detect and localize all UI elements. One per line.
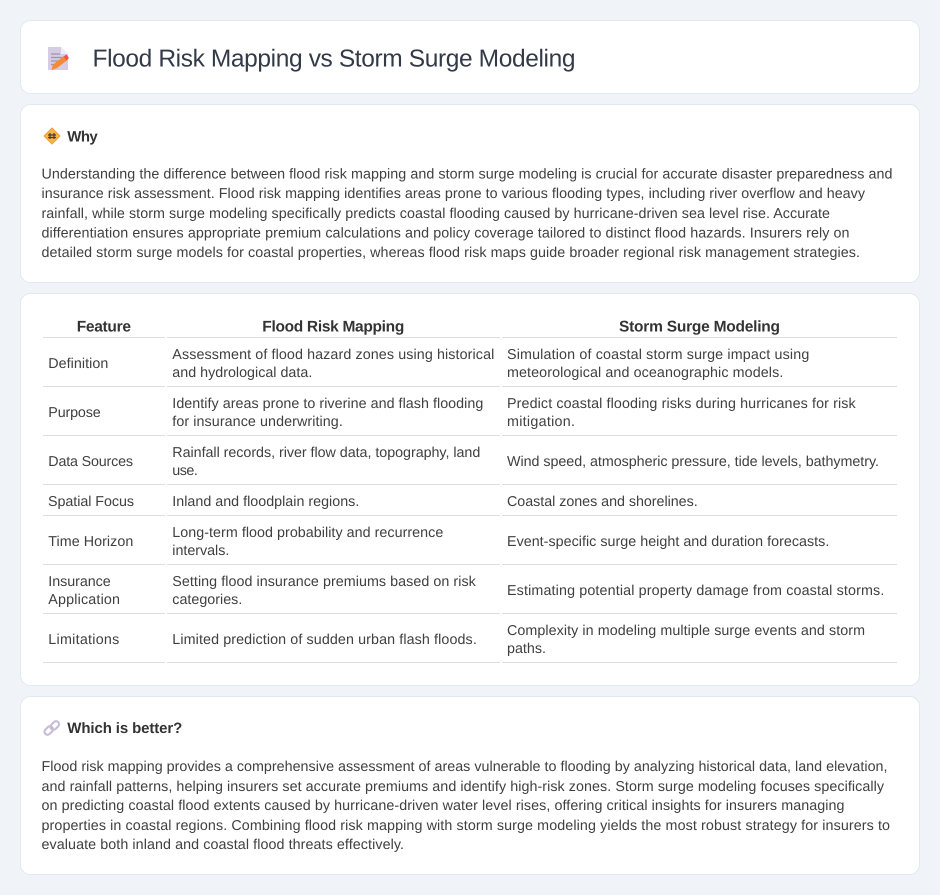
table row: insurance application: [43, 574, 897, 614]
text block: which is better paragraph: properties in coastal regions. Combining flood risk mapping with storm surge modeling yields the most robust strategy for insurers to: [42, 818, 890, 834]
table row: purpose: Predict coastal flooding risks during hurricanes for risk: [507, 396, 857, 412]
text block: which is better paragraph: and rainfall patterns, helping insurers set accurate premiums and identify high-risk zones. Storm surge modeling focuses specifically: [42, 779, 885, 795]
table header row: Storm Surge Modeling: [619, 319, 780, 336]
table row: spatial focus: Spatial Focus: [48, 494, 134, 510]
table row: data sources: Data Sources: [48, 454, 133, 470]
table row: data sources: [43, 445, 897, 485]
icon: warning diamond: [44, 128, 60, 144]
text block: which is better paragraph: on predicting coastal flood extents caused by hurricane-driven water level rises, offering critical insights for insurers managing: [42, 798, 845, 814]
table row: definition: [43, 347, 897, 387]
heading: why: Why: [67, 129, 98, 146]
table row: time horizon: Long-term flood probability and recurrence: [172, 525, 443, 541]
table row: purpose: for insurance underwriting.: [172, 414, 343, 430]
panel: title header: [20, 20, 920, 94]
table row: insurance application: categories.: [172, 592, 242, 608]
table row: time horizon: intervals.: [172, 543, 229, 559]
table row: spatial focus: Inland and floodplain regions.: [172, 494, 359, 510]
table row: time horizon: [43, 525, 897, 565]
table row: purpose: Identify areas prone to riverine and flash flooding: [172, 396, 483, 412]
table header row: Feature: [77, 319, 131, 336]
table row: limitations: Complexity in modeling multiple surge events and storm: [507, 623, 865, 639]
text block: which is better paragraph: evaluate both inland and coastal flood threats effectively.: [42, 837, 404, 853]
table row: time horizon: Time Horizon: [48, 534, 133, 550]
text block: why paragraph: differentiation ensures appropriate premium calculations and policy coverage tailored to distinct flood hazards. Insurers rely on: [42, 226, 850, 242]
text block: which is better paragraph: Flood risk mapping provides a comprehensive assessment of areas vulnerable to flooding by analyzing historical data, land elevation,: [42, 759, 888, 775]
icon: memo with pencil: [48, 47, 69, 70]
table row: limitations: paths.: [507, 641, 546, 657]
table row: data sources: Wind speed, atmospheric pressure, tide levels, bathymetry.: [507, 454, 879, 470]
icon: link: [43, 720, 60, 736]
table row: limitations: Limitations: [48, 632, 119, 648]
table row: limitations: Limited prediction of sudden urban flash floods.: [172, 632, 477, 648]
text block: why paragraph: [42, 166, 893, 261]
table row: definition: meteorological and oceanographic models.: [507, 365, 783, 381]
table row: insurance application: Application: [48, 592, 120, 608]
table row: spatial focus: [43, 494, 897, 516]
table row: purpose: Purpose: [48, 405, 101, 421]
panel: why: [20, 104, 920, 282]
table row: purpose: [43, 396, 897, 436]
table row: data sources: use.: [172, 463, 198, 479]
table row: spatial focus: Coastal zones and shorelines.: [507, 494, 698, 510]
table row: definition: Assessment of flood hazard zones using historical: [172, 347, 494, 363]
table row: data sources: Rainfall records, river flow data, topography, land: [172, 445, 480, 461]
table row: insurance application: Insurance: [48, 574, 111, 590]
table row: time horizon: Event-specific surge height and duration forecasts.: [507, 534, 829, 550]
text block: which is better paragraph: [42, 759, 890, 853]
table row: definition: Simulation of coastal storm surge impact using: [507, 347, 809, 363]
panel: which is better: [20, 696, 920, 874]
text block: why paragraph: Understanding the difference between flood risk mapping and storm surge modeling is crucial for accurate disaster preparedness and: [42, 166, 893, 182]
table header row: [43, 319, 897, 338]
table row: purpose: mitigation.: [507, 414, 575, 430]
table header row: Flood Risk Mapping: [262, 319, 404, 336]
heading: which is better: Which is better?: [67, 720, 182, 737]
text block: why paragraph: rainfall, while storm surge modeling specifically predicts coastal flooding caused by hurricane-driven sea level rise. Accurate: [42, 206, 830, 222]
text block: why paragraph: detailed storm surge models for coastal properties, whereas flood risk maps guide broader regional risk management strategies.: [42, 245, 860, 261]
table row: insurance application: Estimating potential property damage from coastal storms.: [507, 583, 884, 599]
table row: limitations: [43, 623, 897, 663]
table row: definition: Definition: [48, 356, 108, 372]
text block: why paragraph: insurance risk assessment. Flood risk mapping identifies areas prone to various flooding types, including river overflow and heavy: [42, 186, 866, 202]
title: Flood Risk Mapping vs Storm Surge Modeling: [92, 46, 576, 72]
panel: comparison table: [20, 294, 920, 686]
table row: definition: and hydrological data.: [172, 365, 312, 381]
table row: insurance application: Setting flood insurance premiums based on risk: [172, 574, 477, 590]
